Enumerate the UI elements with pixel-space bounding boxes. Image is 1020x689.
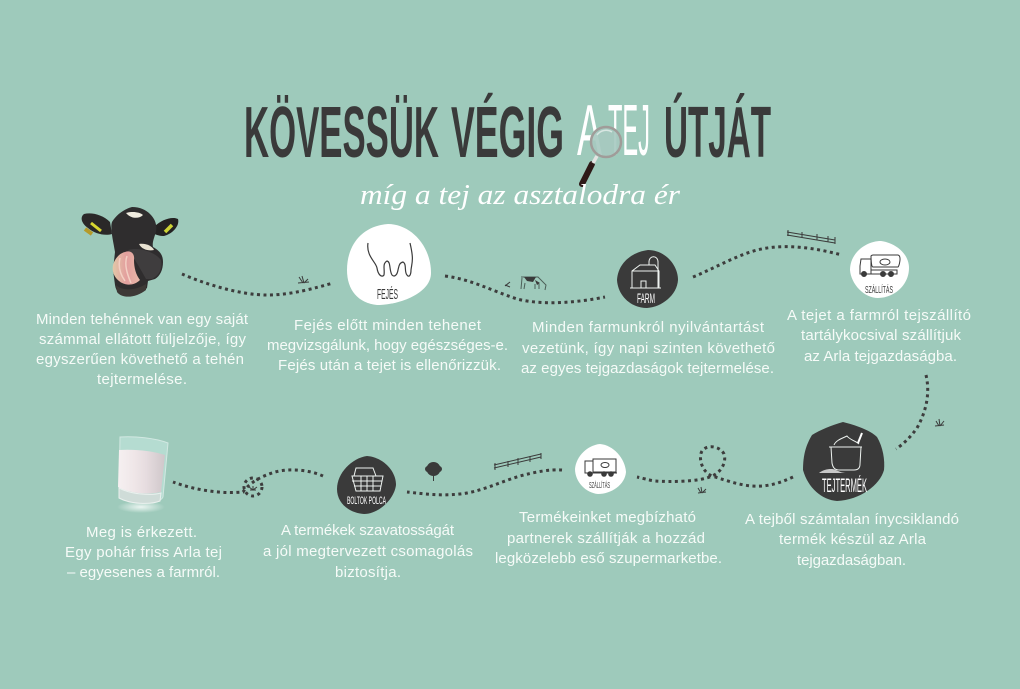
dotted loop — [244, 478, 262, 496]
text: transport: az Arla tejgazdaságba. — [804, 348, 957, 365]
text: packaging: a jól megtervezett csomagolás — [263, 543, 473, 560]
text: dairy — [745, 511, 959, 569]
title: TEJ — [608, 91, 650, 171]
text: transport: tartálykocsival szállítjuk — [801, 327, 962, 344]
icon: fence — [787, 230, 835, 244]
dotted path: transport to dairy — [896, 375, 928, 449]
icon: fence — [494, 453, 541, 470]
text: dairy: tejgazdaságban. — [797, 552, 906, 569]
subtitle: míg a tej az asztalodra ér — [360, 180, 680, 211]
text: milking: Fejés előtt minden tehenet — [294, 317, 482, 334]
text: dairy: A tejből számtalan ínycsiklandó — [745, 511, 959, 528]
icon: grass tuft 4 — [698, 487, 706, 493]
label: szállítás: SZÁLLÍTÁS — [865, 283, 893, 296]
text: arrival: Egy pohár friss Arla tej — [65, 544, 222, 561]
text: ÚTJÁT — [664, 92, 771, 173]
icon: delivery truck — [585, 459, 617, 476]
icon: tanker truck — [860, 255, 900, 276]
step: dairy product badge — [803, 422, 884, 501]
text: farm — [521, 319, 775, 377]
step: delivery badge: SZÁLLÍTÁS — [589, 481, 610, 490]
icon: magnifying glass — [582, 127, 621, 184]
text: delivery: legközelebb eső szupermarketbe. — [495, 550, 722, 567]
step: delivery badge — [575, 444, 626, 494]
icon: tree — [425, 462, 442, 481]
text: transport: A tejet a farmról tejszállító — [787, 307, 971, 324]
icon: cow head — [82, 207, 178, 297]
text: transport — [787, 307, 971, 365]
text: milking: megvizsgálunk, hogy egészséges-e. — [267, 337, 508, 354]
icon: grass tuft 1 — [298, 276, 309, 283]
icon: basket — [352, 468, 383, 491]
dotted path: shelf to glass — [173, 470, 323, 493]
text: delivery — [495, 509, 722, 567]
step: farm badge: FARM — [637, 290, 655, 306]
icon: grass tuft 3 — [935, 419, 944, 426]
icon: barn — [630, 257, 661, 288]
step: store shelf badge — [337, 456, 396, 514]
text: arrival: Meg is érkezett. — [86, 524, 197, 541]
text: delivery: Termékeinket megbízható — [519, 509, 696, 526]
icon: glass of milk — [117, 437, 168, 513]
dotted path: farm to transport — [693, 247, 842, 277]
text: packaging: A termékek szavatosságát — [281, 522, 455, 539]
text: farm: az egyes tejgazdaságok tejtermelése. — [521, 360, 774, 377]
text: farm: vezetünk, így napi szinten követhető — [522, 340, 775, 357]
text: ear tag — [36, 311, 249, 388]
step: farm badge — [617, 250, 678, 308]
text: ear tag: Minden tehénnek van egy saját — [36, 311, 249, 328]
text: packaging — [263, 522, 473, 581]
text: arrival — [65, 524, 222, 581]
title: KÖVESSÜK — [244, 93, 439, 173]
step: transport badge — [850, 241, 909, 298]
text: ear tag: számmal ellátott füljelzője, így — [39, 331, 246, 348]
title: VÉGIG — [451, 93, 564, 173]
step: milking badge: FEJÉS — [377, 286, 398, 303]
text: ear tag: tejtermelése. — [97, 371, 187, 388]
text: milking: Fejés után a tejet is ellenőrizzük. — [278, 357, 501, 374]
icon: udder — [368, 243, 412, 276]
step: milking badge — [347, 224, 431, 305]
text: packaging: biztosítja. — [335, 564, 401, 581]
icon: dairy pot — [819, 433, 862, 473]
text: farm: Minden farmunkról nyilvántartást — [532, 319, 765, 336]
icon: tuft in loop — [249, 486, 257, 490]
icon: grazing cow — [521, 277, 546, 290]
text: ear tag: egyszerűen követhető a tehén — [36, 351, 244, 368]
text: arrival: – egyesenes a farmról. — [67, 564, 220, 581]
dotted path: dairy loop to delivery — [637, 447, 793, 486]
text: delivery: partnerek szállítják a hozzád — [507, 530, 705, 547]
step: dairy product badge: TEJTERMÉK — [822, 476, 867, 497]
dotted path: delivery to shelf — [407, 470, 562, 495]
title: A — [577, 91, 602, 171]
icon: grass tuft 2 — [505, 282, 510, 287]
dotted path: milking to farm — [445, 276, 605, 303]
text: dairy: termék készül az Arla — [779, 531, 927, 548]
dotted path: cow to milking — [182, 274, 333, 295]
step: store shelf badge: BOLTOK POLCA — [347, 495, 386, 507]
text: milking — [267, 317, 508, 374]
